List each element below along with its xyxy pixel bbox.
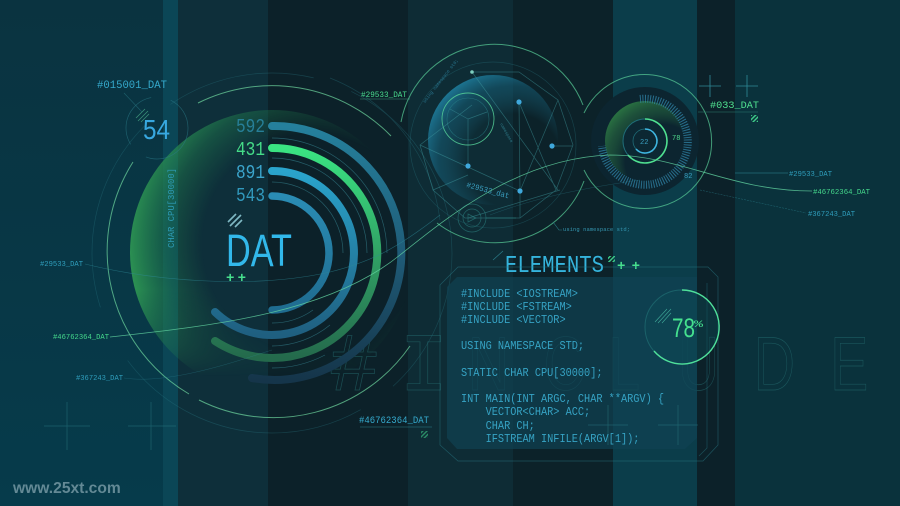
- callout curves: [85, 155, 812, 379]
- right side labels: #367243_DAT: [808, 211, 855, 219]
- hatched ring: [602, 99, 688, 185]
- target dial: [584, 74, 712, 208]
- vertical label: CHAR CPU[30000]: [167, 168, 177, 248]
- code panel: [440, 267, 719, 461]
- elements heading: ++: [617, 259, 640, 275]
- code text: IFSTREAM INFILE(ARGV[1]);: [486, 433, 639, 446]
- left side labels: #29533_DAT: [40, 261, 83, 269]
- left side labels: #46762364_DAT: [53, 334, 109, 342]
- background word INCLUDE: #: [329, 321, 379, 415]
- DAT title: DAT: [226, 225, 292, 276]
- elements heading: ELEMENTS: [505, 253, 604, 280]
- code note: [553, 222, 630, 233]
- code text: CHAR CH;: [486, 420, 535, 433]
- network lines: [420, 72, 573, 218]
- right side labels: #29533_DAT: [789, 171, 832, 179]
- arc 431: [215, 148, 377, 358]
- percent ring: [645, 290, 719, 364]
- outer ring: [584, 74, 712, 208]
- target dial: 78: [672, 135, 680, 143]
- code text: #INCLUDE <FSTREAM>: [461, 301, 572, 314]
- gauge values: 891: [236, 162, 265, 184]
- small gear: [458, 204, 516, 232]
- code text: STATIC CHAR CPU[30000];: [461, 367, 603, 380]
- plus marks: ++: [226, 271, 246, 287]
- code text: VECTOR<CHAR> ACC;: [486, 406, 590, 419]
- code text: #INCLUDE <IOSTREAM>: [461, 288, 578, 301]
- blue sphere: [428, 75, 558, 205]
- thin inner arcs: [272, 138, 387, 368]
- percent ring: 78: [672, 313, 695, 343]
- left crosshairs: [44, 402, 176, 450]
- target dial: 82: [684, 173, 692, 181]
- label #46762364_DAT: [359, 416, 432, 438]
- background word INCLUDE: NCLUDE: [468, 322, 868, 407]
- code text: #INCLUDE <VECTOR>: [461, 314, 566, 327]
- dark disc: [591, 87, 699, 195]
- badge 54: [126, 97, 188, 159]
- main gauge: [92, 73, 452, 433]
- code note: using namespace std;: [563, 226, 630, 233]
- inner circle: [442, 93, 494, 145]
- label #015001_DAT: #015001_DAT: [97, 80, 167, 92]
- hatch mark: [228, 214, 242, 227]
- label #015001_DAT: [97, 80, 167, 112]
- sphere network: using namespace std;: [422, 58, 460, 104]
- label #29533_DAT top: #29533_DAT: [361, 90, 407, 100]
- dial values: 22: [640, 139, 648, 147]
- arc 592: [252, 126, 401, 380]
- sphere network: [401, 44, 630, 243]
- thin orbit rings: [107, 86, 410, 418]
- watermark: www.25xt.com: [12, 480, 121, 497]
- label #46762364_DAT: #46762364_DAT: [359, 416, 429, 427]
- gauge values: 592: [236, 116, 265, 138]
- gauge values: 431: [236, 139, 265, 161]
- background word INCLUDE: I: [399, 321, 449, 415]
- outer ring: [401, 44, 584, 243]
- code text: USING NAMESPACE STD;: [461, 340, 584, 353]
- background word INCLUDE: [329, 321, 868, 415]
- green sphere: [130, 110, 345, 366]
- left side labels: #367243_DAT: [76, 375, 123, 383]
- label #033_DAT: #033_DAT: [710, 100, 759, 112]
- badge 54: 54: [143, 114, 170, 145]
- sphere labels: #29533_dat: [465, 181, 510, 201]
- gauge values: [236, 116, 265, 207]
- right side labels: #46762364_DAT: [813, 189, 870, 197]
- panel frame: [440, 267, 718, 461]
- label #033_DAT: [698, 75, 759, 122]
- network nodes: [465, 70, 555, 194]
- percent ring: %: [694, 320, 703, 331]
- arc 543: [272, 196, 329, 310]
- sphere network: namespace: [498, 123, 513, 144]
- left side labels: [40, 261, 123, 383]
- gauge values: 543: [236, 185, 265, 207]
- code text: INT MAIN(INT ARGC, CHAR **ARGV) {: [461, 393, 664, 406]
- right side labels: [789, 171, 870, 219]
- rings: [623, 119, 667, 163]
- panel fill: [447, 277, 697, 449]
- arc 891: [215, 171, 354, 335]
- code text: [461, 288, 664, 446]
- crosshairs: [588, 405, 698, 445]
- green hemisphere: [605, 101, 685, 181]
